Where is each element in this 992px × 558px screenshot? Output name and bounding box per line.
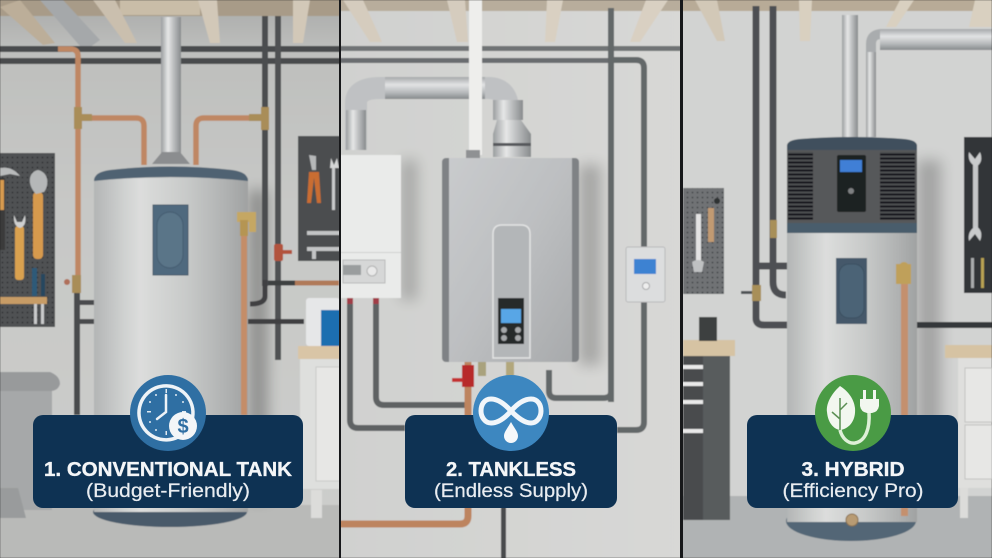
digital control panel: [498, 298, 524, 344]
heading: hybrid: 3. HYBRID: [802, 459, 904, 481]
bottom drain pipe: [501, 505, 506, 558]
subheading: efficiency pro: (Efficiency Pro): [782, 481, 924, 502]
ceiling joists: [682, 0, 992, 41]
conventional water heater tank: [93, 166, 256, 527]
pegboard left with tools: [683, 188, 724, 294]
ceiling joists: [0, 0, 340, 45]
trash can: [0, 372, 60, 518]
label card: conventional tank: [33, 415, 303, 508]
lower left pipes: [350, 304, 465, 428]
main tankless heater: [442, 150, 579, 376]
hybrid water heater: [786, 137, 917, 541]
drain valve: [846, 514, 858, 526]
subheading: endless supply: (Endless Supply): [434, 481, 588, 502]
copper supply line: [340, 362, 468, 524]
steel flue and duct: [842, 15, 992, 137]
storage jug and cabinet: [298, 298, 340, 518]
copper pipes: [58, 49, 262, 285]
brass elbow and copper line: [896, 262, 911, 516]
pipe valve: [741, 220, 777, 301]
panel: conventional tank scene: [0, 0, 340, 558]
label card: hybrid: [747, 415, 958, 508]
brass elbow and copper outlet: [237, 212, 256, 415]
right vertical gas pipes: [549, 8, 644, 430]
pegboard left with tools: [0, 153, 55, 327]
overhead steel duct: [346, 77, 531, 157]
wall pipes: [756, 6, 992, 325]
secondary white unit: [340, 155, 401, 306]
heading: tankless: 2. TANKLESS: [446, 459, 576, 481]
flue vent: [152, 17, 190, 164]
right cabinet: [945, 345, 992, 518]
wall thermostat: [626, 247, 665, 302]
icon: clock with dollar coin: $: [177, 416, 189, 438]
brass fittings: [64, 107, 269, 293]
panel dividers: [339, 0, 683, 558]
white vent pipe: [469, 0, 482, 155]
access plate: [836, 258, 867, 324]
panel: tankless scene: [340, 0, 681, 558]
panel: hybrid scene: [682, 0, 992, 558]
overhead duct: [40, 0, 100, 50]
subheading: budget friendly: (Budget-Friendly): [86, 481, 250, 502]
access plate: [153, 205, 188, 275]
pegboard right with tools: [274, 136, 340, 261]
horizontal pipes: [0, 46, 340, 64]
label card: tankless: [405, 415, 617, 508]
recess: [493, 225, 530, 358]
icon: clock with dollar coin: [130, 375, 206, 451]
heat pump head: [787, 137, 917, 233]
vertical dark pipes: [74, 16, 339, 415]
control display: [837, 155, 866, 212]
left workbench: [682, 317, 735, 520]
horizontal pipes: [340, 46, 681, 63]
heading: conventional tank: 1. CONVENTIONAL TANK: [44, 459, 293, 481]
red shutoff valve: [452, 365, 474, 387]
pegboard right with tools: [964, 137, 992, 293]
icon: leaf and plug: [815, 375, 891, 451]
icon: infinity with water drop: [473, 375, 549, 451]
ceiling joists: [340, 0, 681, 42]
